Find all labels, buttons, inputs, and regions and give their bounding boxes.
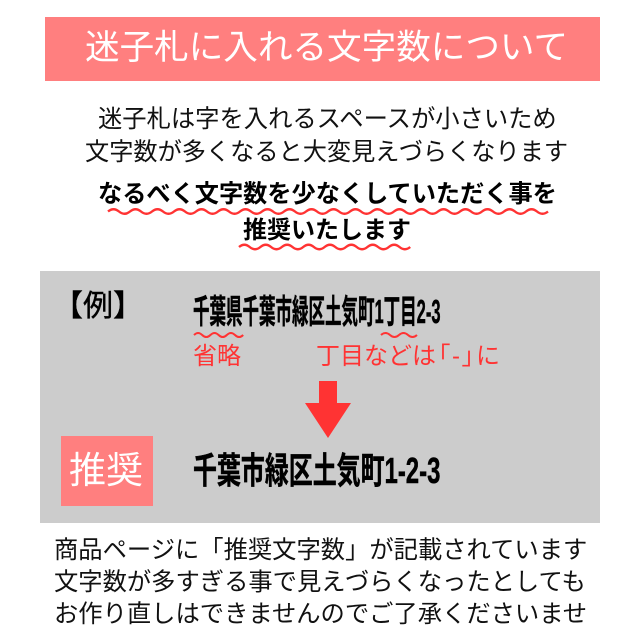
intro text: [85, 106, 568, 166]
intro text: 文字数が多くなると大変見えづらくなります: [85, 139, 568, 166]
example panel: [40, 271, 600, 523]
footer note: [54, 537, 587, 628]
recommended badge: [61, 436, 153, 506]
note: omit: 省略: [193, 343, 241, 370]
recommendation text with wavy underline: なるべく文字数を少なくしていただく事を: [98, 181, 557, 208]
footer note: 商品ページに「推奨文字数」が記載されています: [54, 537, 587, 564]
intro text: 迷子札は字を入れるスペースが小さいため: [98, 106, 557, 133]
title text: 迷子札に入れる文字数について: [85, 29, 568, 67]
footer note: お作り直しはできませんのでご了承くださいませ: [54, 601, 587, 628]
icon: down arrow: [305, 381, 351, 438]
footer note: 文字数が多すぎる事で見えづらくなったとしても: [54, 569, 586, 596]
title banner: [45, 17, 600, 81]
note: chome to hyphen: 丁目などは「-」に: [316, 343, 500, 370]
recommended address: 千葉市緑区土気町1-2-3: [193, 450, 440, 491]
wavy marks on omitted parts: [193, 332, 418, 338]
badge text: 推奨: [69, 450, 143, 491]
original address: 千葉県千葉市緑区土気町1丁目2-3: [193, 293, 441, 330]
example label: 【例】: [53, 290, 143, 323]
recommendation text with wavy underline: 推奨いたします: [243, 217, 411, 244]
recommendation text with wavy underline: [98, 181, 557, 250]
